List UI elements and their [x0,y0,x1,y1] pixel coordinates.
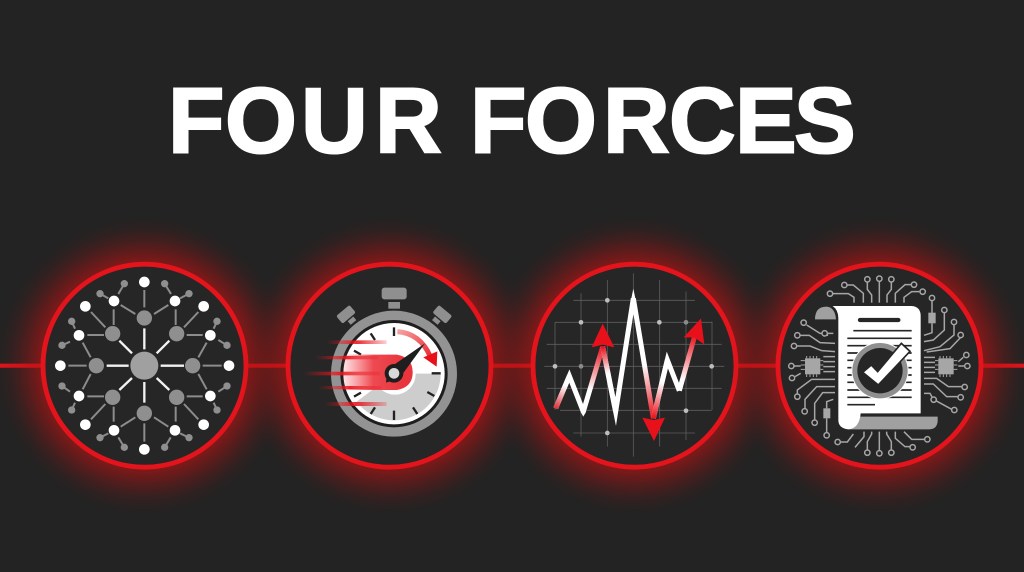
force 3: volatility chart [498,227,768,504]
force 1: network [0,216,294,516]
infographic canvas [0,86,1024,504]
title: FOUR FORCES [168,68,856,172]
icon: stopwatch [303,288,457,437]
force 2: stopwatch [253,227,524,504]
icon: network graph [55,277,234,455]
connecting line [0,364,1024,368]
force 4: document and circuit [730,216,1024,516]
icon: document with check badge [815,306,938,429]
icon: volatility line with arrows [544,273,724,457]
icon: circuit traces [789,276,970,456]
